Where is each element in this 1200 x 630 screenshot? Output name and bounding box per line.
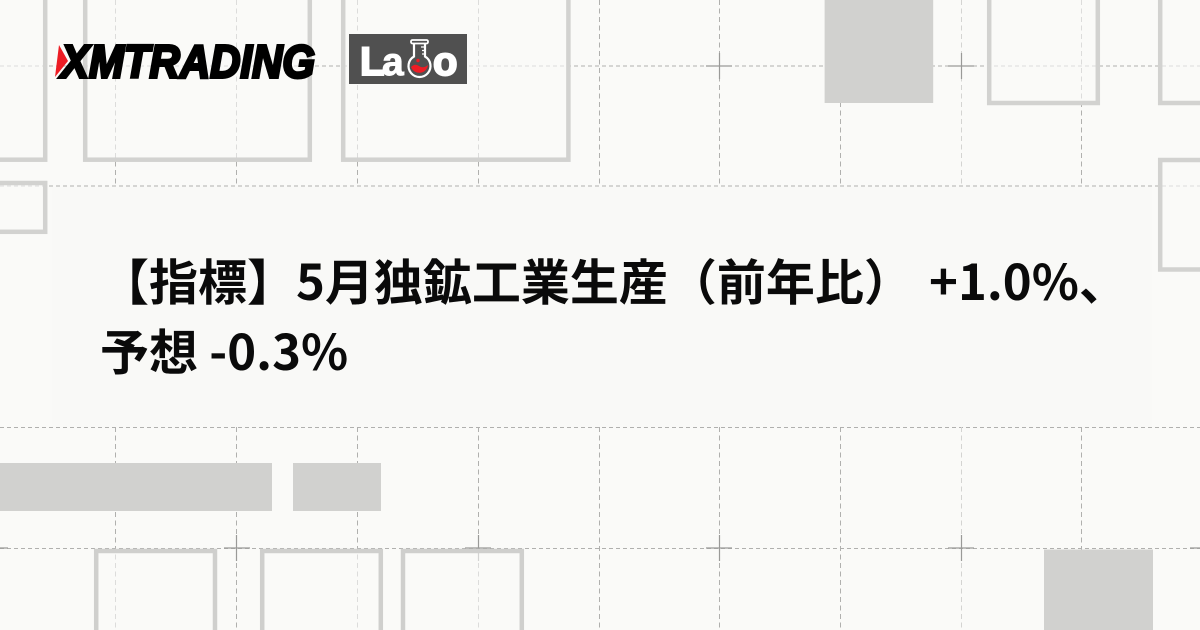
icon: red chevron: [55, 45, 68, 77]
logo: Lab: a: [382, 41, 404, 84]
icon: flask: [408, 40, 430, 77]
title: [100, 244, 1128, 385]
title: 予想 -0.3%: [100, 314, 348, 385]
logo: Lab: [349, 34, 467, 84]
panel: title backdrop: [52, 187, 1152, 427]
wordmark letters: L: [360, 40, 384, 84]
outlined candlestick boxes: bottom row: [96, 551, 522, 630]
outlined candlestick boxes: top row: [0, 0, 1200, 270]
logo: Lab: o: [433, 40, 457, 84]
title: 【指標】5月独鉱工業生産（前年比） +1.0%、: [100, 244, 1128, 315]
logo: XMTRADING: [55, 38, 316, 88]
